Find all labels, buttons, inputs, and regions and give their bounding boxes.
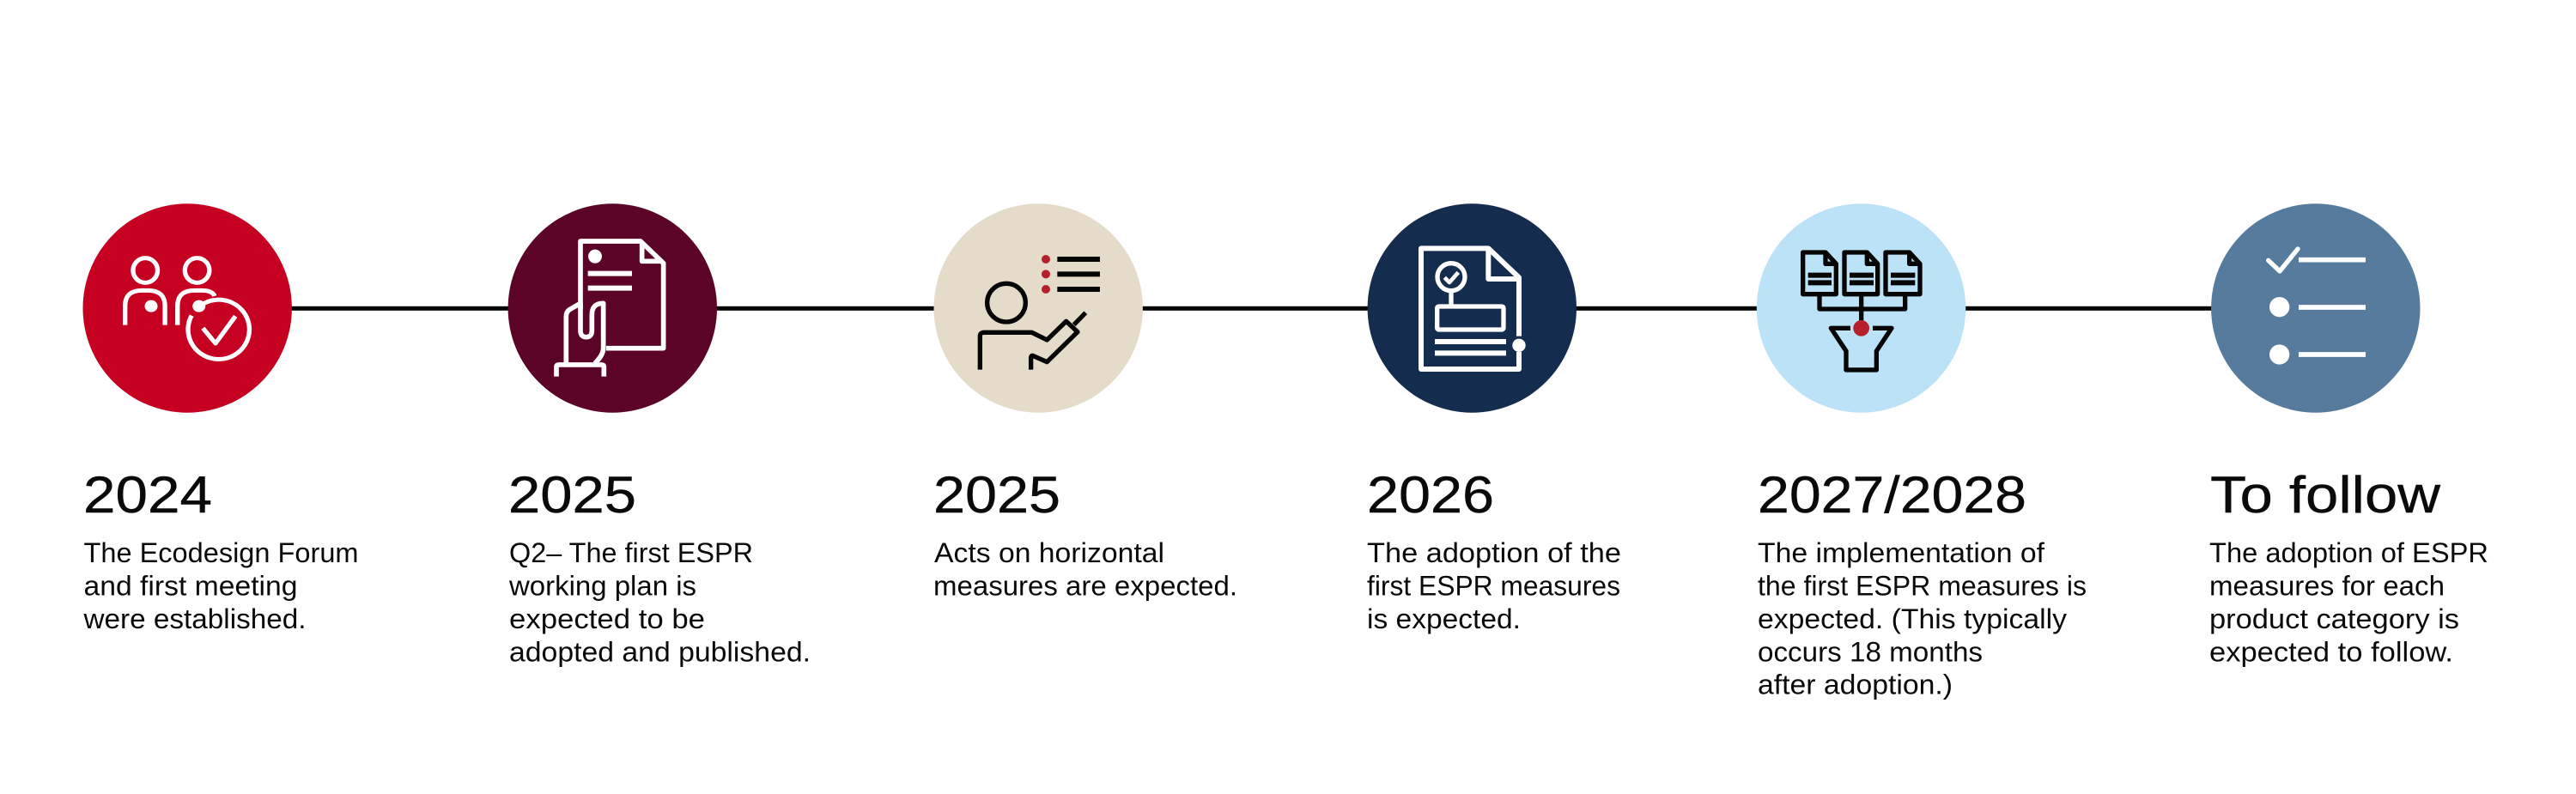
circle: red xyxy=(82,203,292,413)
description: measures for each xyxy=(2209,570,2445,601)
description: The implementation of xyxy=(1758,537,2044,568)
description xyxy=(82,537,359,634)
step: 2024 xyxy=(82,203,359,634)
step: 2027/2028 xyxy=(1757,203,2087,700)
circle: steel blue xyxy=(2211,203,2420,413)
icon: two people with check xyxy=(125,258,249,359)
year: 2027/2028 xyxy=(1758,466,2026,524)
circle: light blue xyxy=(1757,203,1965,413)
description: the first ESPR measures is xyxy=(1758,570,2087,601)
step: 2025 working plan xyxy=(508,203,811,668)
description xyxy=(1758,537,2087,700)
step: to follow xyxy=(2209,203,2488,668)
description: is expected. xyxy=(1367,603,1521,634)
year: 2025 xyxy=(933,466,1060,524)
step: 2026 xyxy=(1367,203,1621,634)
description xyxy=(1367,537,1621,634)
description: The adoption of the xyxy=(1367,537,1621,568)
description: expected. (This typically xyxy=(1758,603,2067,634)
description: Q2– The first ESPR xyxy=(509,537,753,568)
icon: checklist xyxy=(2269,249,2366,365)
heading: To follow xyxy=(2210,466,2441,524)
timeline connector line xyxy=(187,306,2316,311)
year: 2026 xyxy=(1367,466,1494,524)
description: expected to follow. xyxy=(2209,637,2453,668)
year: 2025 xyxy=(508,466,636,524)
description: product category is xyxy=(2209,603,2459,634)
icon: documents into funnel xyxy=(1803,252,1920,370)
icon: certified document xyxy=(1421,248,1526,369)
description: adopted and published. xyxy=(509,637,811,668)
step: 2025 horizontal measures xyxy=(933,203,1237,602)
description: measures are expected. xyxy=(933,570,1237,601)
description xyxy=(508,537,811,668)
icon: hand holding document xyxy=(556,241,664,377)
year: 2024 xyxy=(83,466,212,524)
description: The Ecodesign Forum xyxy=(84,537,359,568)
description: occurs 18 months xyxy=(1758,637,1983,668)
description: first ESPR measures xyxy=(1367,570,1620,601)
description xyxy=(933,537,1237,601)
description: were established. xyxy=(82,603,307,634)
description: expected to be xyxy=(509,603,705,634)
description: The adoption of ESPR xyxy=(2209,537,2488,568)
icon: presenter with list xyxy=(980,255,1100,370)
circle: wine xyxy=(508,203,717,413)
description: and first meeting xyxy=(84,570,297,601)
circle: beige xyxy=(934,203,1143,413)
description: working plan is xyxy=(508,570,696,601)
description: Acts on horizontal xyxy=(934,537,1164,568)
description: after adoption.) xyxy=(1758,670,1953,700)
description xyxy=(2209,537,2488,668)
circle: navy xyxy=(1368,203,1577,413)
